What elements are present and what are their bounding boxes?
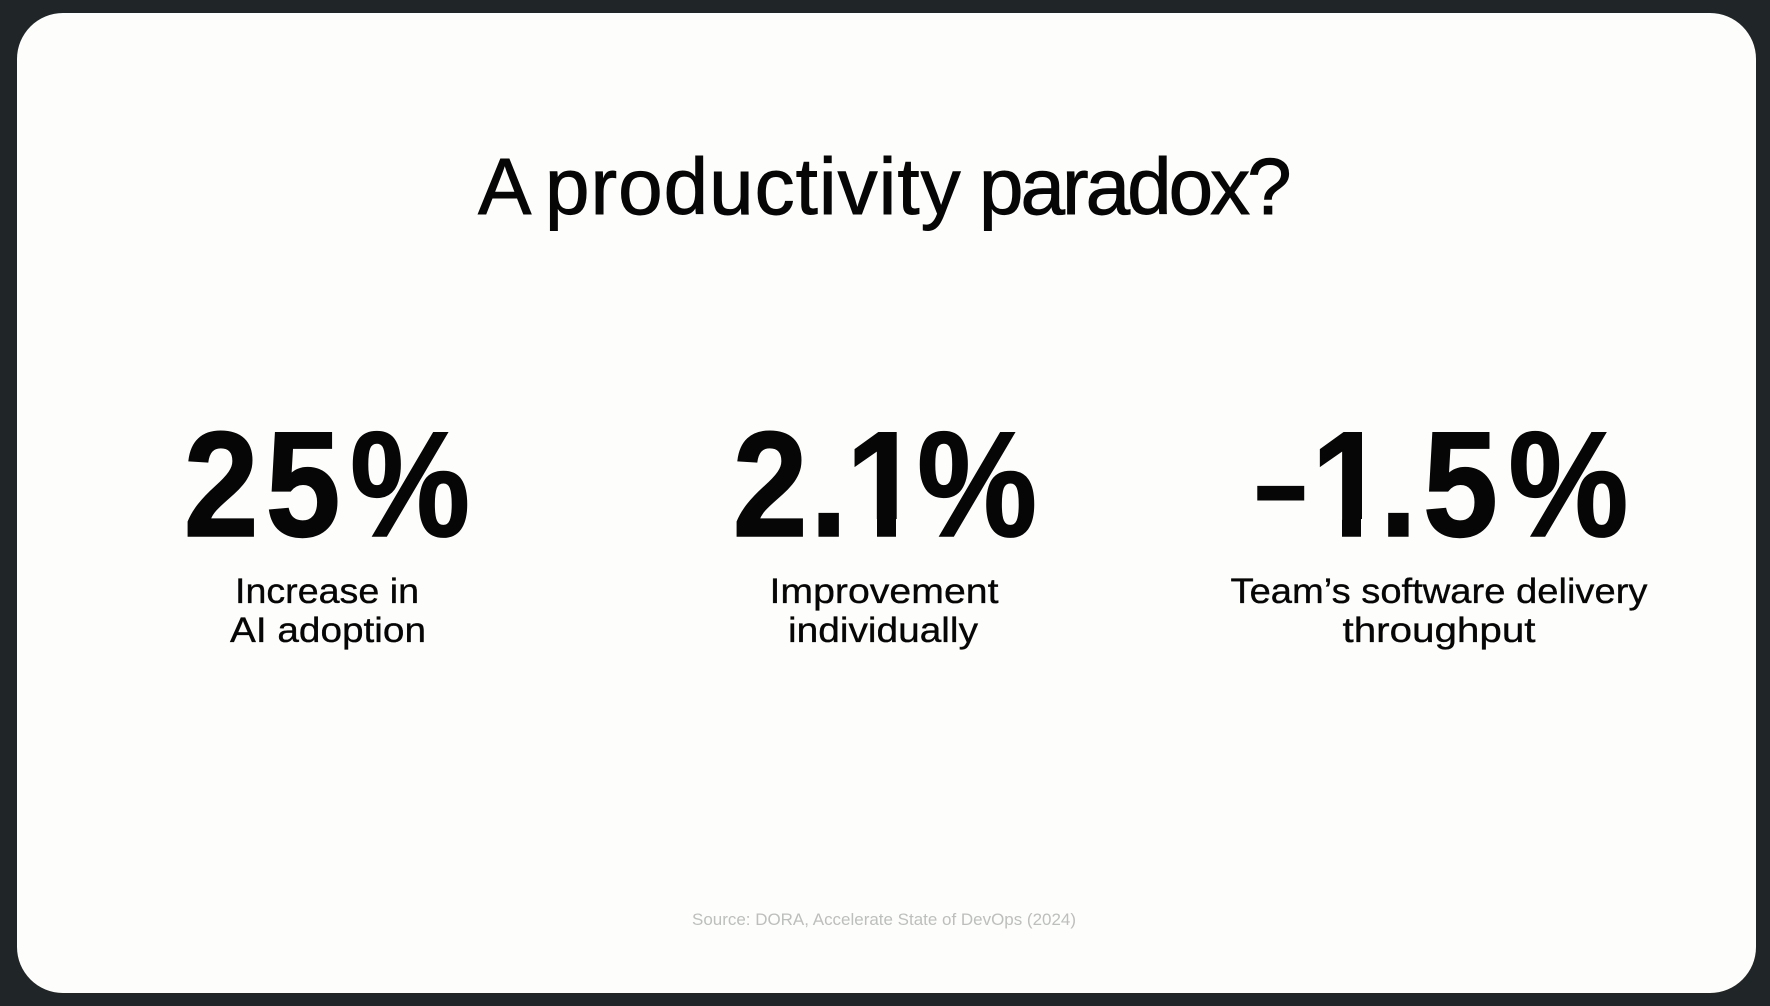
title: productivity — [545, 142, 985, 231]
label: team throughput — [1230, 572, 1648, 650]
stat: team throughput — [1230, 401, 1648, 650]
source note: Source: DORA, Accelerate State of DevOps (2024) — [692, 910, 1076, 929]
number: 2.1%: 2.1% — [733, 401, 1037, 569]
label: AI adoption: Increase in — [235, 572, 419, 611]
label: AI adoption — [230, 572, 426, 650]
number: -1.5%: 1.5% — [1311, 401, 1628, 569]
label: improvement individually: Improvement — [770, 572, 999, 611]
title: A — [478, 142, 549, 231]
label: team throughput: throughput — [1342, 611, 1536, 650]
label: improvement individually — [770, 572, 999, 650]
label: improvement individually: individually — [788, 611, 979, 650]
label: team throughput: Team’s software delivery — [1230, 572, 1648, 611]
number: 25%: 25% — [184, 401, 470, 569]
title: paradox? — [979, 142, 1289, 231]
label: AI adoption: AI adoption — [230, 611, 426, 650]
number: -1.5%: − — [1256, 439, 1306, 546]
stat: individual improvement — [733, 401, 1037, 650]
stat: AI adoption — [184, 401, 470, 650]
